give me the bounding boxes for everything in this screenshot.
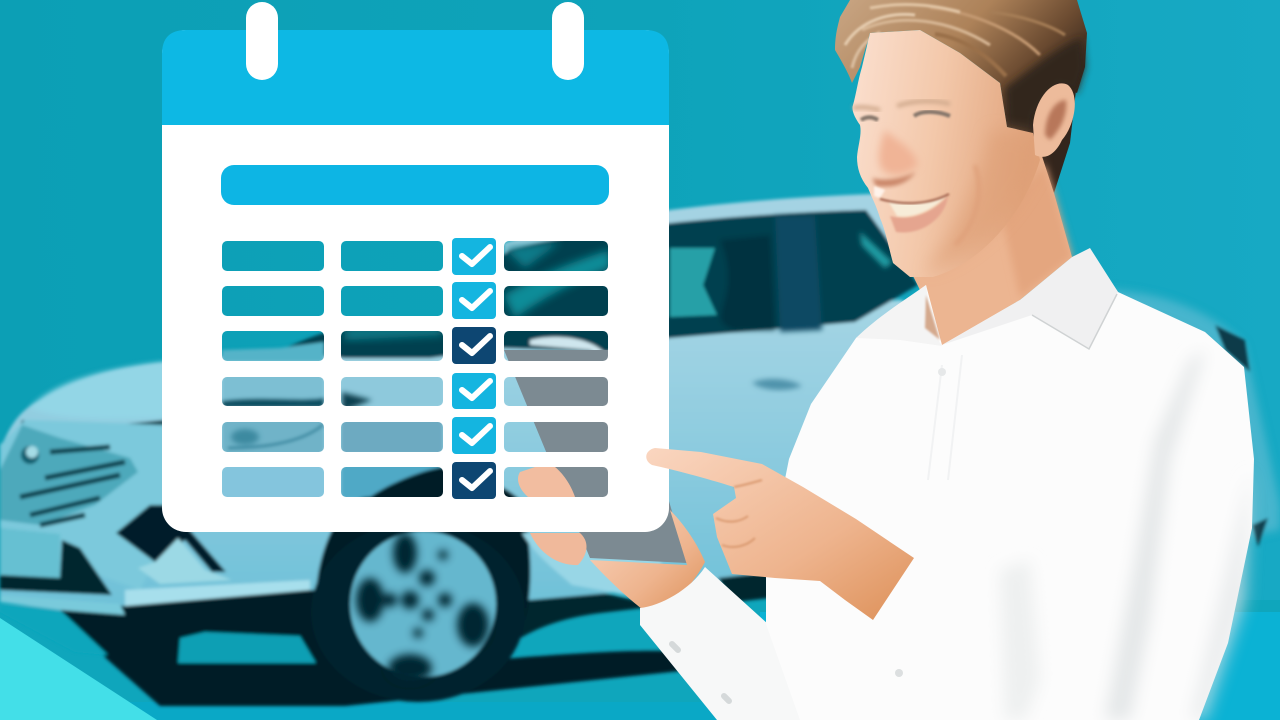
- nose: [879, 130, 918, 175]
- right collar: [942, 248, 1118, 349]
- hood grille line: [20, 420, 165, 437]
- face: [852, 30, 1040, 277]
- body lower highlight: [125, 580, 310, 606]
- shirt folds: [1000, 350, 1250, 720]
- brows: [853, 101, 950, 110]
- hood tones seen through table: [222, 372, 324, 406]
- ear: [1033, 83, 1075, 157]
- title bar: [221, 165, 609, 205]
- front fascia: [0, 420, 165, 590]
- ring left: [246, 2, 278, 80]
- cheek shadow: [925, 130, 1038, 272]
- rear body: [1100, 290, 1280, 545]
- check boxes: [452, 238, 496, 499]
- mouth: [880, 194, 949, 232]
- wheel arch: [315, 467, 530, 640]
- corner triangle: [0, 618, 157, 720]
- left sleeve: [640, 567, 802, 720]
- wiper highlight: [530, 337, 608, 358]
- door handle: [752, 379, 802, 390]
- cuff buttons: [672, 644, 729, 701]
- shirt torso: [766, 250, 1254, 720]
- phone: [504, 350, 687, 563]
- hair strands: [845, 5, 1065, 76]
- floor shadows: [55, 585, 345, 706]
- car body: [0, 300, 1200, 606]
- fog lamp recess: [116, 505, 226, 572]
- grille: [0, 425, 138, 525]
- hair back: [1000, 90, 1076, 193]
- neck: [900, 150, 1072, 346]
- calendar: [162, 2, 669, 532]
- front wheel: [311, 522, 525, 702]
- dark hair side: [1005, 38, 1085, 133]
- left hood: [30, 362, 165, 419]
- man: [640, 0, 1254, 720]
- collar inner shadow: [925, 295, 940, 340]
- sill panel: [522, 533, 670, 600]
- roof: [504, 194, 900, 300]
- floor: [0, 600, 1280, 720]
- pointing hand: [646, 448, 914, 620]
- windshield reflections: [504, 250, 610, 318]
- car: [0, 194, 1280, 706]
- holding hand: [518, 467, 705, 613]
- calendar sheet: [162, 30, 669, 532]
- lower bumper: [0, 528, 60, 578]
- right sill shadow: [718, 572, 770, 602]
- ring right: [552, 2, 584, 80]
- hood curve line: [228, 424, 324, 448]
- windshield and windows: [280, 210, 918, 358]
- eyes: [861, 112, 950, 120]
- smile crease: [955, 165, 979, 245]
- left collar: [856, 285, 942, 346]
- placket: [928, 355, 962, 480]
- hair: [835, 0, 1087, 133]
